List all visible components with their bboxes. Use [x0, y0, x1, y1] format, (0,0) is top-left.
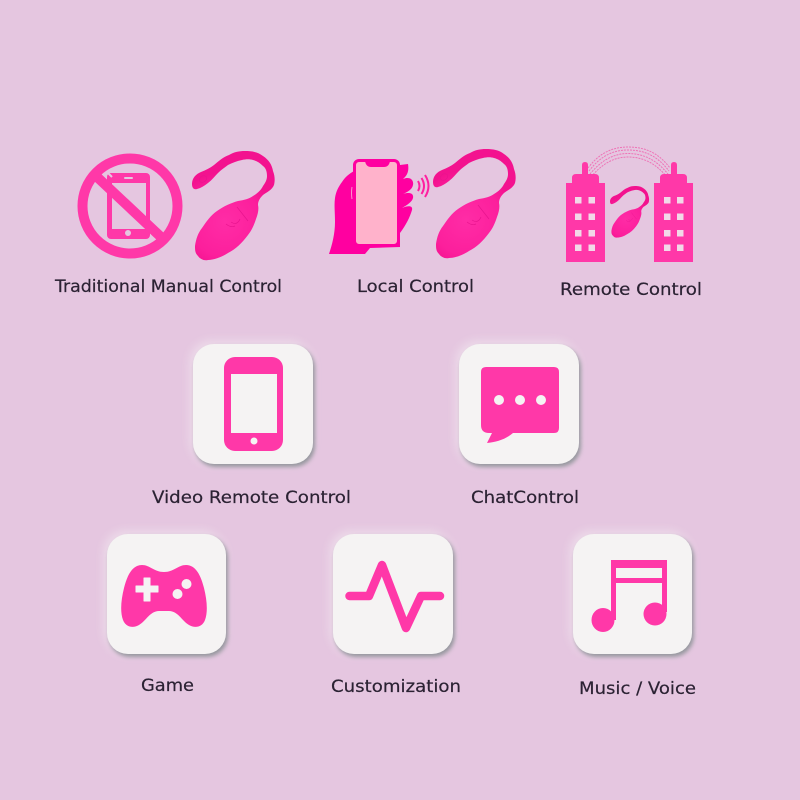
- card: [573, 534, 692, 654]
- label: video remote control: Video Remote Control: [152, 488, 351, 508]
- card: [459, 344, 579, 464]
- panel: local control: [329, 149, 516, 297]
- panel: video remote control: [152, 344, 351, 508]
- label: remote control: Remote Control: [560, 280, 702, 300]
- icon: right building: [654, 162, 693, 262]
- panel: chat control: [459, 344, 579, 508]
- icon: left building: [566, 162, 605, 262]
- label: game: Game: [141, 676, 194, 696]
- panel: game: [107, 534, 226, 696]
- icon: chat bubble: [481, 367, 559, 443]
- label: chat control: ChatControl: [471, 488, 579, 508]
- card: [107, 534, 226, 654]
- icon: no phone: [82, 158, 178, 254]
- label: traditional manual control: Traditional Manual Control: [54, 277, 282, 297]
- icon: game controller: [121, 565, 207, 627]
- label: music voice: Music / Voice: [579, 679, 696, 699]
- icon: pulse line: [350, 565, 440, 628]
- panel: remote control: [560, 147, 702, 300]
- panel: traditional manual control: [54, 151, 282, 297]
- label: customization: Customization: [331, 677, 461, 697]
- icon: egg device: [433, 149, 516, 258]
- panel: music voice: [573, 534, 696, 699]
- icon: egg device: [192, 151, 275, 260]
- icon: egg device: [610, 186, 649, 238]
- icon: hand holding phone: [329, 160, 413, 254]
- icon: signal waves: [418, 175, 428, 197]
- icon: signal arcs: [588, 147, 670, 177]
- label: local control: Local Control: [357, 277, 474, 297]
- panel: customization: [331, 534, 461, 697]
- icon: phone: [224, 357, 283, 451]
- card: [193, 344, 313, 464]
- card: [333, 534, 453, 654]
- icon: music notes: [592, 560, 667, 632]
